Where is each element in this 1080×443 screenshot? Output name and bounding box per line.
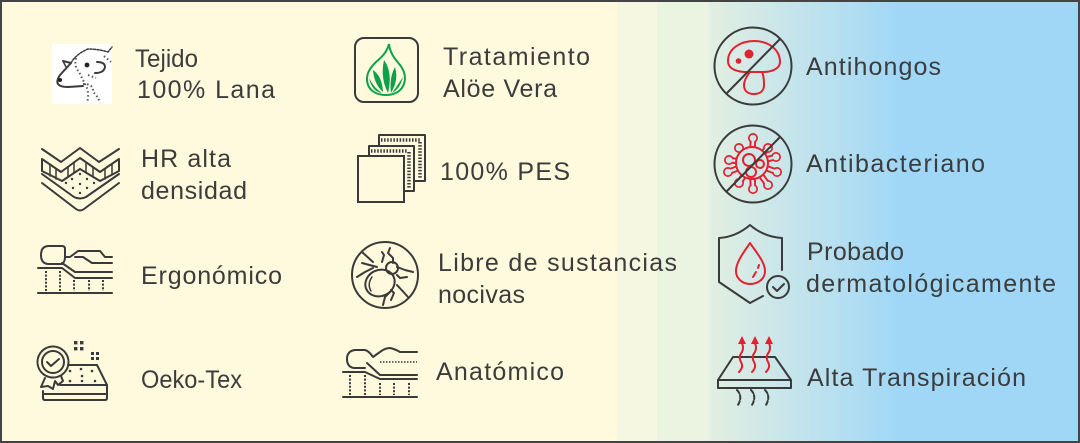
text: Antihongos: Antihongos — [806, 53, 941, 81]
text: Ergonómico: Ergonómico — [141, 262, 282, 290]
text: Tratamiento Alöe Vera: Alöe Vera — [443, 75, 557, 103]
icon: mattress layers — [42, 148, 119, 210]
text: 100% PES: 100% PES — [440, 158, 570, 186]
icon: no fungus — [714, 28, 792, 104]
text: Anatómico: Anatómico — [436, 358, 564, 386]
text: Probado dermatológicamente — [806, 238, 1056, 298]
icon: no bacteria — [714, 126, 792, 202]
text: HR alta densidad: densidad — [141, 177, 247, 205]
text: HR alta densidad — [141, 145, 247, 205]
icon: shield with drop and check — [719, 225, 789, 303]
text: Tratamiento Alöe Vera — [443, 43, 590, 103]
icon: certified mattress — [38, 341, 107, 400]
text: Tratamiento Alöe Vera: Tratamiento — [443, 43, 590, 71]
text: Libre de sustancias nocivas: nocivas — [438, 281, 525, 309]
text: HR alta densidad: HR alta — [141, 145, 231, 173]
icon: mite in circle — [352, 242, 418, 308]
icon: sheep — [52, 44, 112, 104]
text: Tejido 100% Lana: Tejido — [135, 45, 198, 73]
icon: aloe vera drop — [355, 38, 418, 102]
icon: breathable mattress — [718, 336, 791, 405]
icon: anatomic mattress — [343, 348, 417, 397]
text: Libre de sustancias nocivas: Libre de sustancias — [438, 249, 677, 277]
text: Antibacteriano: Antibacteriano — [806, 150, 985, 178]
icon: ergonomic mattress — [38, 246, 112, 293]
text: Tejido 100% Lana — [135, 45, 275, 104]
text: Probado dermatológicamente: Probado — [807, 238, 904, 266]
text: Probado dermatológicamente: dermatológicamente — [806, 270, 1056, 298]
icon: fabric layers — [358, 135, 425, 202]
text: Libre de sustancias nocivas — [438, 249, 677, 309]
text: Alta Transpiración: Alta Transpiración — [807, 364, 1026, 392]
text: Oeko-Tex: Oeko-Tex — [141, 366, 242, 394]
text: Tejido 100% Lana: 100% Lana — [137, 76, 275, 104]
